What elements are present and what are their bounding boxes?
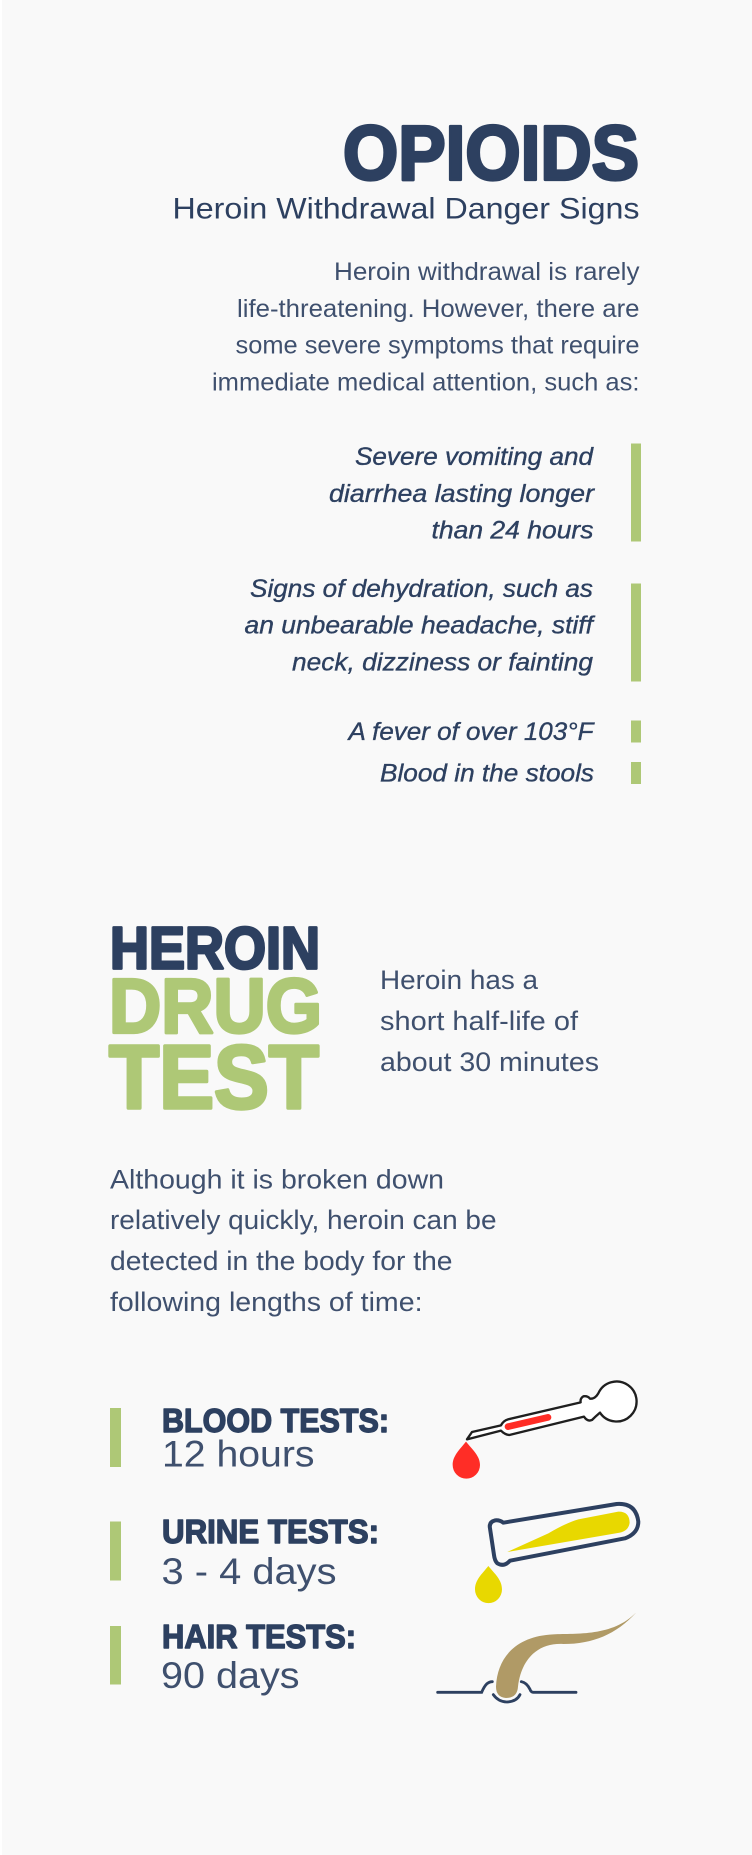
detection paragraph [110,1164,496,1317]
icon: blood dropper [453,1381,637,1479]
heading: Heroin drug test: TEST [109,1028,319,1128]
intro text block: immediate medical attention, such as: [212,368,640,396]
danger sign: dehydration [244,575,641,682]
half-life text block: Heroin has a [380,965,538,995]
hair test row: HAIR TESTS: [162,1618,356,1655]
danger sign: dehydration: neck, dizziness or fainting [292,648,593,676]
blood test row: 12 hours [162,1432,314,1474]
detection paragraph: detected in the body for the [110,1246,452,1276]
hair test row [110,1618,356,1696]
danger sign: dehydration: an unbearable headache, stiff [244,612,596,640]
heading: Heroin drug test: DRUG [109,964,322,1050]
danger sign: vomiting and diarrhea: Severe vomiting and [355,443,594,471]
hair test row: 90 days [161,1654,300,1696]
icon: hair follicle [438,1612,637,1702]
detection paragraph: relatively quickly, heroin can be [110,1205,496,1235]
intro text block [212,258,640,396]
title: OPIOIDS: OPIOIDS [343,110,639,196]
urine test row: URINE TESTS: [162,1513,379,1550]
detection paragraph: Although it is broken down [110,1164,444,1194]
subtitle: Heroin Withdrawal Danger Signs [172,192,640,226]
blood test row: BLOOD TESTS: [162,1402,389,1439]
heading: Heroin drug test: HEROIN [110,916,320,982]
blood test row [110,1402,389,1474]
intro text block: life-threatening. However, there are [237,295,640,323]
danger sign: fever: A fever of over 103°F [346,718,595,746]
urine test row: 3 - 4 days [162,1550,336,1592]
danger sign: dehydration: Signs of dehydration, such as [250,575,593,603]
detection paragraph: following lengths of time: [110,1287,422,1317]
intro text block: Heroin withdrawal is rarely [334,258,640,286]
icon: urine test tube [475,1504,638,1603]
danger sign: vomiting and diarrhea [329,443,641,544]
danger sign: vomiting and diarrhea: diarrhea lasting longer [329,480,596,508]
half-life text block [380,965,599,1077]
danger sign: blood in stools: Blood in the stools [380,760,594,788]
heading: Heroin drug test [109,916,322,1128]
danger sign: vomiting and diarrhea: than 24 hours [432,516,594,544]
half-life text block: about 30 minutes [380,1047,599,1077]
intro text block: some severe symptoms that require [236,332,640,360]
urine test row [110,1513,379,1592]
half-life text block: short half-life of [380,1006,579,1036]
